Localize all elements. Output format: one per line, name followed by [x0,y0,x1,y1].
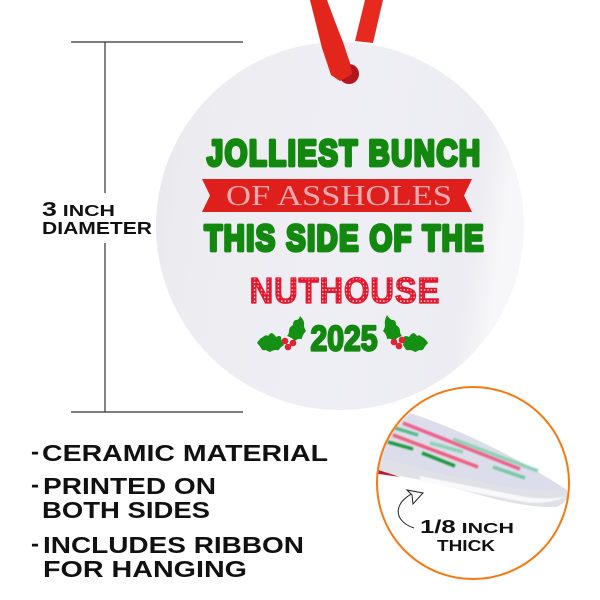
thickness label: THICK [437,538,496,555]
ceramic edge photo [370,413,568,507]
dimension bracket [71,42,243,412]
feature list [31,438,328,582]
ornament disc [156,42,524,410]
hanging hole [339,64,359,84]
thickness label: 1/8 INCH [420,517,514,537]
orange ring [377,387,569,579]
feature: includes ribbon: - [31,530,39,556]
heading line: this side of the: THIS SIDE OF THE [204,217,484,258]
inset: thickness detail [370,387,569,579]
feature: includes ribbon [31,530,304,582]
feature: includes ribbon: FOR HANGING [43,556,247,582]
ribbon front strand [310,0,352,81]
feature: printed on both sides: BOTH SIDES [42,497,210,523]
red banner: OF ASSHOLES [226,181,452,212]
ornament print [202,132,484,358]
heading line: jolliest bunch: JOLLIEST BUNCH [207,132,480,173]
feature: printed on both sides [31,471,216,523]
thickness label [420,517,514,555]
ribbon back strand [355,0,383,43]
icon: holly left [257,316,306,352]
icon: holly right [383,315,428,352]
blurred print stripes [388,423,538,478]
feature: includes ribbon: INCLUDES RIBBON [43,532,304,558]
arrow [398,490,423,528]
red banner [202,179,472,212]
dimension label [42,199,152,238]
dimension label: DIAMETER [42,218,152,238]
feature: ceramic material: - [31,438,39,464]
year: 2025 [310,318,378,358]
heading line: nuthouse: NUTHOUSE [250,272,440,311]
dimension label: 3 INCH [42,199,115,221]
feature: printed on both sides: PRINTED ON [43,473,216,499]
feature: ceramic material: CERAMIC MATERIAL [42,440,328,466]
feature: printed on both sides: - [31,471,39,497]
